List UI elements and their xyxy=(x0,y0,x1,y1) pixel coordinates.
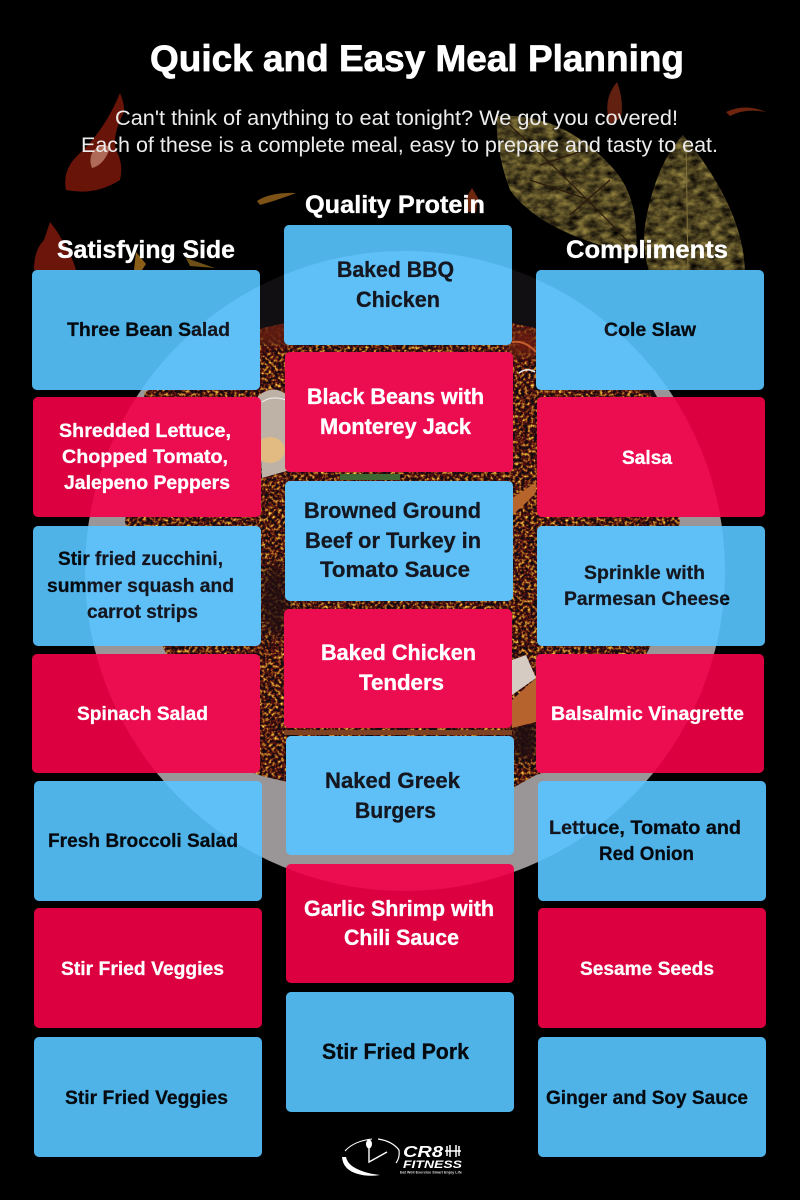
card: Stir Fried Pork xyxy=(286,992,514,1112)
card: Baked BBQ Chicken: Chicken xyxy=(356,287,440,312)
card: Balsalmic Vinagrette: Balsalmic Vinagrette xyxy=(551,704,744,725)
card: Garlic Shrimp with Chili Sauce: Garlic Shrimp with xyxy=(304,896,494,921)
logo: CR8 Fitness xyxy=(342,1139,463,1176)
card: Black Beans with Monterey Jack xyxy=(285,352,513,472)
background photo: plate of food xyxy=(85,245,725,891)
card: Salsa: Salsa xyxy=(622,448,672,469)
card: Browned Ground Beef or Turkey in Tomato Sauce: Tomato Sauce xyxy=(320,557,470,582)
card: Garlic Shrimp with Chili Sauce xyxy=(286,864,514,983)
card: Stir fried zucchini, summer squash and carrot strips: Stir fried zucchini, xyxy=(58,549,223,570)
card: Shredded Lettuce, Chopped Tomato, Jalepeno Peppers: Chopped Tomato, xyxy=(62,447,228,468)
card: Stir Fried Veggies (blue): Stir Fried Veggies xyxy=(65,1088,228,1109)
title: Quick and Easy Meal Planning xyxy=(150,38,684,79)
heading: Compliments: Compliments xyxy=(566,236,728,264)
column: Satisfying Side xyxy=(32,270,262,1157)
card: Cole Slaw: Cole Slaw xyxy=(604,320,696,341)
card: Baked BBQ Chicken: Baked BBQ xyxy=(337,257,454,282)
card: Cole Slaw xyxy=(536,270,764,390)
card: Stir Fried Pork: Stir Fried Pork xyxy=(322,1039,470,1064)
card: Ginger and Soy Sauce: Ginger and Soy Sauce xyxy=(546,1088,748,1109)
card: Shredded Lettuce, Chopped Tomato, Jalepeno Peppers xyxy=(33,397,261,517)
card: Spinach Salad xyxy=(32,654,260,773)
translucent overlay circle xyxy=(85,251,725,891)
card: Browned Ground Beef or Turkey in Tomato Sauce xyxy=(285,481,513,601)
background photo: chili peppers and spices xyxy=(34,82,766,270)
card: Browned Ground Beef or Turkey in Tomato Sauce: Beef or Turkey in xyxy=(305,528,481,553)
card: Three Bean Salad: Three Bean Salad xyxy=(67,320,230,341)
card: Naked Greek Burgers: Burgers xyxy=(355,798,436,823)
card: Baked Chicken Tenders xyxy=(284,609,512,728)
card: Stir fried zucchini, summer squash and carrot strips: summer squash and xyxy=(47,576,234,597)
card: Balsalmic Vinagrette xyxy=(536,654,764,773)
card: Sprinkle with Parmesan Cheese xyxy=(537,526,765,646)
intro text: Each of these is a complete meal, easy to prepare and tasty to eat. xyxy=(81,134,718,157)
card: Black Beans with Monterey Jack: Black Beans with xyxy=(307,384,484,409)
card: Stir Fried Veggies (blue) xyxy=(34,1037,262,1157)
card: Naked Greek Burgers: Naked Greek xyxy=(325,768,461,793)
heading: Quality Protein: Quality Protein xyxy=(305,191,485,219)
card: Sesame Seeds xyxy=(538,908,766,1028)
card: Sprinkle with Parmesan Cheese: Parmesan Cheese xyxy=(564,589,730,610)
icon: barbell xyxy=(445,1145,461,1157)
card: Baked BBQ Chicken xyxy=(284,225,512,345)
card: Stir Fried Veggies (red) xyxy=(34,908,262,1028)
logo tagline: Eat Well Exercise Smart Enjoy Life xyxy=(400,1170,463,1174)
column: Quality Protein xyxy=(284,225,514,1112)
card: Stir fried zucchini, summer squash and carrot strips xyxy=(33,526,261,646)
card: Three Bean Salad xyxy=(32,270,260,390)
card: Black Beans with Monterey Jack: Monterey Jack xyxy=(320,414,472,439)
logo wordmark: CR8 xyxy=(403,1144,443,1161)
card: Fresh Broccoli Salad: Fresh Broccoli Salad xyxy=(48,831,238,852)
card: Stir fried zucchini, summer squash and carrot strips: carrot strips xyxy=(87,602,198,623)
card: Shredded Lettuce, Chopped Tomato, Jalepeno Peppers: Shredded Lettuce, xyxy=(59,421,231,442)
card: Garlic Shrimp with Chili Sauce: Chili Sauce xyxy=(344,925,459,950)
card: Lettuce, Tomato and Red Onion: Red Onion xyxy=(599,844,694,865)
column: Compliments xyxy=(536,270,766,1157)
heading: Satisfying Side: Satisfying Side xyxy=(57,236,235,264)
card: Lettuce, Tomato and Red Onion xyxy=(538,781,766,901)
card: Sprinkle with Parmesan Cheese: Sprinkle with xyxy=(584,563,705,584)
card: Baked Chicken Tenders: Tenders xyxy=(359,670,444,695)
card: Ginger and Soy Sauce xyxy=(538,1037,766,1157)
card: Browned Ground Beef or Turkey in Tomato Sauce: Browned Ground xyxy=(304,498,481,523)
card: Lettuce, Tomato and Red Onion: Lettuce, Tomato and xyxy=(549,818,741,839)
card: Salsa xyxy=(537,397,765,517)
intro text: Can't think of anything to eat tonight? We got you covered! xyxy=(115,107,678,130)
card: Fresh Broccoli Salad xyxy=(34,781,262,901)
logo wordmark: Fitness: FITNESS xyxy=(403,1159,463,1171)
intro text xyxy=(81,107,718,157)
card: Baked Chicken Tenders: Baked Chicken xyxy=(321,640,476,665)
icon: clock with fork and spoon xyxy=(342,1139,399,1176)
card: Naked Greek Burgers xyxy=(286,736,514,855)
card: Sesame Seeds: Sesame Seeds xyxy=(580,959,714,980)
card: Shredded Lettuce, Chopped Tomato, Jalepeno Peppers: Jalepeno Peppers xyxy=(64,473,230,494)
background photo: bay leaves xyxy=(496,116,745,270)
card: Spinach Salad: Spinach Salad xyxy=(77,704,208,725)
card: Stir Fried Veggies (red): Stir Fried Veggies xyxy=(61,959,224,980)
